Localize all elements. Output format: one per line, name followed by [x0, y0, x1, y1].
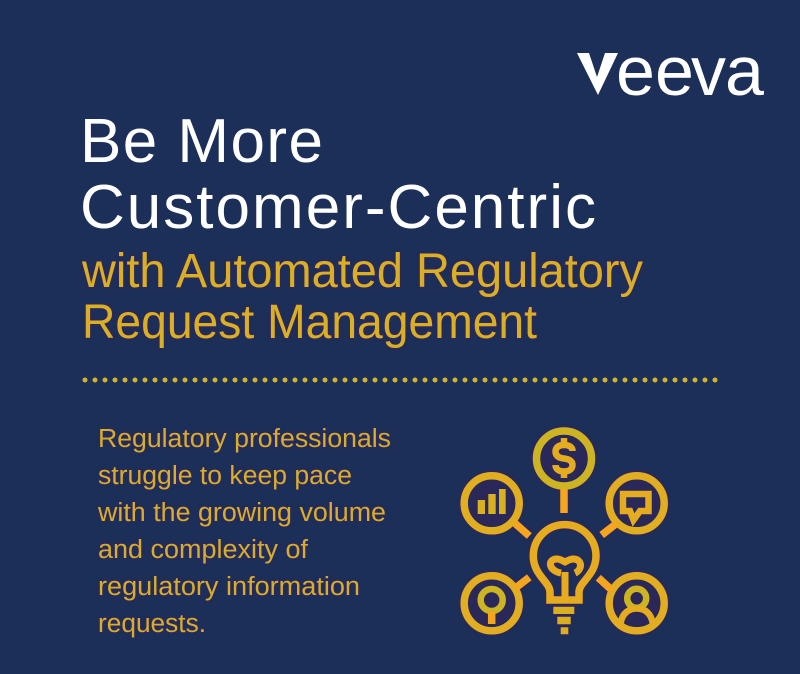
- logo: Veeva: eeva: [616, 32, 764, 110]
- icon: speech bubble magnifier: [602, 476, 664, 535]
- body text: requests.: [98, 610, 206, 638]
- subtitle: with Automated Regulatory: [81, 245, 643, 298]
- title: [80, 107, 596, 242]
- icon: person magnifier: [598, 576, 664, 631]
- icon: light bulb with magnifiers: [464, 431, 664, 634]
- icon: light bulb: [533, 525, 596, 634]
- icon: bar chart magnifier: [464, 476, 529, 536]
- dotted divider: [85, 378, 716, 382]
- body text: with the growing volume: [97, 499, 386, 527]
- body text: Regulatory professionals: [98, 425, 391, 453]
- title: Customer-Centric: [80, 173, 596, 242]
- body text: [97, 425, 391, 638]
- subtitle: Request Management: [82, 296, 537, 349]
- body text: regulatory information: [98, 573, 360, 601]
- body text: struggle to keep pace: [98, 462, 352, 490]
- subtitle: [81, 245, 643, 349]
- title: Be More: [80, 107, 323, 176]
- body text: and complexity of: [98, 536, 309, 564]
- icon: pin magnifier: [464, 576, 529, 631]
- icon: dollar magnifier: [536, 431, 592, 513]
